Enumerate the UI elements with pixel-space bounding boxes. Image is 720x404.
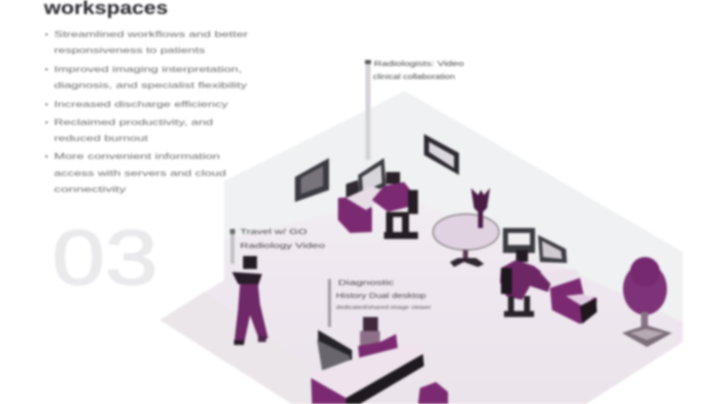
- callout: travel: Radiology Video: [240, 243, 325, 250]
- floor edge shade: [160, 292, 340, 404]
- desk: [540, 269, 581, 290]
- desk top: [310, 343, 423, 400]
- callout: radiologists: Radiologists: Video: [374, 61, 464, 68]
- chair: [408, 190, 418, 214]
- benefits list: [45, 29, 248, 194]
- person: [516, 250, 528, 262]
- callout: radiologists: clinical collaboration: [373, 74, 455, 81]
- callout: diagnostic: History Dual desktop: [336, 293, 426, 300]
- callout: diagnostic: [328, 279, 431, 327]
- floor: [160, 195, 683, 404]
- monitor back: [346, 180, 360, 200]
- workstation: right: [500, 228, 597, 324]
- benefits list: connectivity: [54, 184, 127, 194]
- callout: radiologists: [365, 60, 464, 160]
- desk: [338, 196, 372, 233]
- plant tree: [622, 257, 672, 347]
- workstation: radiologist: [338, 158, 418, 239]
- callout: travel: Travel w/ GO: [240, 229, 308, 236]
- benefits list: access with servers and cloud: [54, 168, 226, 178]
- benefits list: Reclaimed productivity, and: [54, 117, 213, 127]
- person body: [372, 182, 412, 212]
- monitors: [503, 228, 535, 253]
- round table with vase: [433, 188, 499, 267]
- benefits list: Improved imaging interpretation,: [54, 64, 242, 74]
- callout: diagnostic: Diagnostic: [338, 280, 395, 287]
- monitor: [358, 158, 386, 198]
- stool: [418, 382, 448, 404]
- wall screen left: [295, 158, 329, 202]
- benefits list: Increased discharge efficiency: [54, 99, 229, 109]
- back walls: [224, 91, 683, 340]
- benefits list: Streamlined workflows and better: [54, 29, 248, 39]
- wall screen right: [424, 134, 459, 175]
- callout: diagnostic: dedicated/shared image viewer: [336, 305, 431, 311]
- benefits list: •: [45, 29, 48, 39]
- benefits list: •: [45, 64, 48, 74]
- benefits list: diagnosis, and specialist flexibility: [54, 80, 248, 90]
- section number: 03: [52, 213, 158, 301]
- receptionist: [363, 317, 378, 332]
- benefits list: •: [45, 151, 48, 161]
- callout: travel: [230, 229, 325, 264]
- benefits list: •: [45, 99, 48, 109]
- benefits list: •: [45, 117, 48, 127]
- benefits list: reduced burnout: [54, 133, 149, 143]
- desk front: [346, 354, 424, 404]
- room: [160, 91, 683, 404]
- monitor: [318, 330, 352, 362]
- front reception desk: [310, 317, 448, 404]
- standing person with tablet: [232, 256, 268, 345]
- person head: [386, 172, 400, 184]
- benefits list: More convenient information: [54, 151, 220, 161]
- benefits list: responsiveness to patients: [54, 45, 205, 55]
